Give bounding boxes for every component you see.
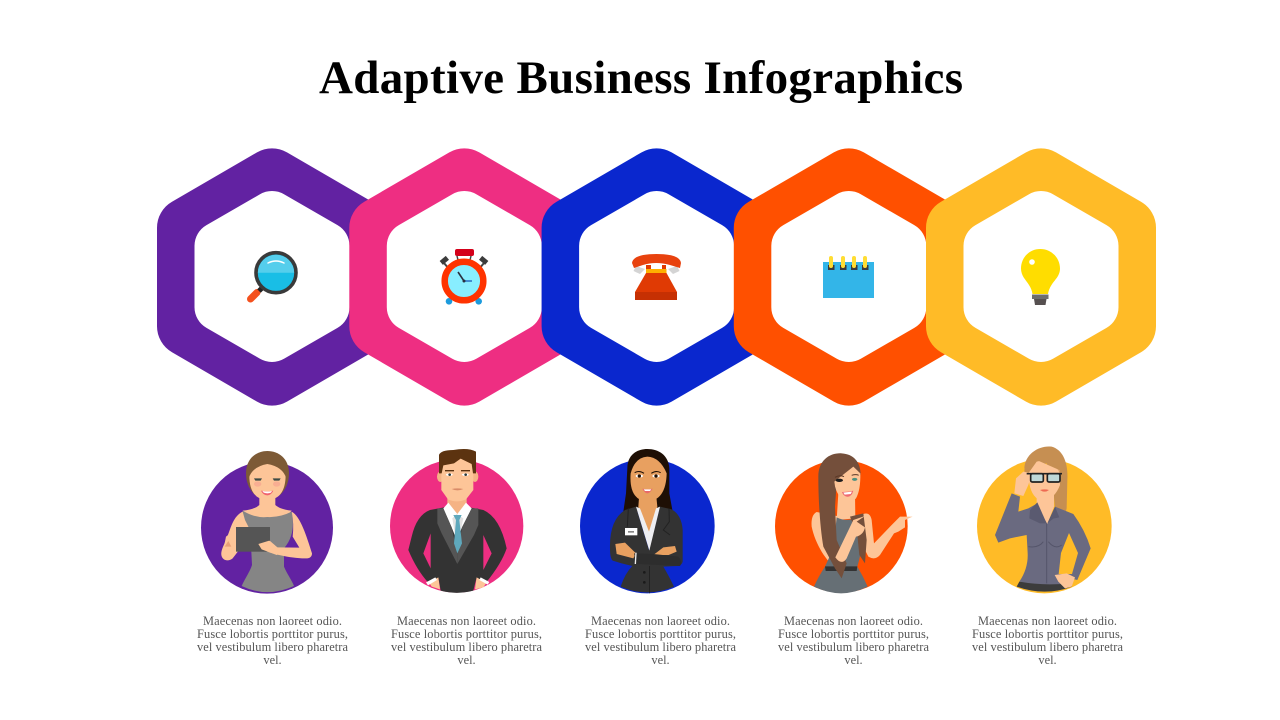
text block 4: Fusce lobortis porttitor purus,	[778, 627, 929, 641]
panel: blue hexagon	[542, 148, 772, 406]
text block 1: vel.	[263, 653, 282, 667]
buttons and center seam	[643, 571, 646, 574]
smile	[842, 491, 853, 497]
tablet	[236, 527, 270, 552]
text block 3: vel.	[651, 653, 670, 667]
text block 5: Fusce lobortis porttitor purus,	[972, 627, 1123, 641]
shirt	[443, 503, 472, 540]
eyes	[446, 473, 453, 476]
purple circle	[201, 462, 333, 594]
text block 5	[972, 614, 1124, 667]
eyes	[254, 478, 262, 481]
left arm	[221, 512, 253, 560]
right arm	[258, 512, 312, 558]
eyes	[836, 479, 843, 482]
text block 5: vel vestibulum libero pharetra	[972, 640, 1124, 654]
suit	[408, 505, 507, 593]
face	[834, 467, 860, 502]
text block 4: Maecenas non laoreet odio.	[784, 614, 923, 628]
mouth	[452, 488, 463, 490]
long dark hair	[623, 449, 673, 512]
icon: telephone	[632, 254, 681, 300]
pink circle	[390, 459, 523, 593]
fringe	[248, 458, 287, 478]
text block 1: Fusce lobortis porttitor purus,	[197, 627, 348, 641]
text block 2: vel vestibulum libero pharetra	[391, 640, 542, 654]
smile	[261, 491, 273, 495]
dress	[814, 517, 868, 593]
panel: orange hexagon	[734, 148, 964, 406]
panel: pink hexagon	[349, 148, 579, 406]
neck	[447, 495, 467, 515]
lapels	[437, 508, 457, 564]
icon: light bulb	[1021, 249, 1060, 305]
hair	[818, 453, 861, 578]
neck and chest	[837, 493, 855, 520]
cuffs	[426, 577, 437, 585]
hair	[439, 449, 476, 473]
text block 1: vel vestibulum libero pharetra	[197, 640, 348, 654]
person 3: businesswoman with arms crossed	[580, 449, 715, 593]
person 4: woman pointing	[775, 453, 913, 593]
shoulders and left arm	[812, 512, 847, 567]
neck	[1037, 495, 1054, 524]
glasses	[1031, 474, 1060, 482]
icon: magnifying glass	[250, 253, 296, 299]
name badge	[625, 528, 637, 535]
eyes	[636, 474, 643, 478]
text block 1	[197, 614, 348, 667]
collar	[1029, 502, 1047, 523]
text block 2: Maecenas non laoreet odio.	[397, 614, 536, 628]
text block 3: Maecenas non laoreet odio.	[591, 614, 730, 628]
person 1: woman with tablet	[201, 451, 333, 594]
cheeks	[254, 481, 261, 487]
face	[1028, 460, 1060, 502]
text block 2	[391, 614, 542, 667]
hair back	[246, 451, 289, 495]
ponytail	[1024, 446, 1067, 522]
text block 4: vel.	[844, 653, 863, 667]
icon: alarm clock	[440, 249, 488, 305]
tie	[453, 515, 462, 553]
orange circle	[775, 460, 908, 593]
text block 3: Fusce lobortis porttitor purus,	[585, 627, 736, 641]
crossed arms	[615, 543, 636, 558]
gap between arm and waist	[1059, 533, 1078, 574]
title: Adaptive Business Infographics	[319, 52, 963, 104]
ears	[437, 471, 444, 482]
belt	[825, 566, 857, 571]
yellow circle	[977, 459, 1112, 593]
face	[249, 462, 286, 500]
blue circle	[580, 459, 715, 593]
lips	[1040, 489, 1049, 492]
right hand over tablet	[258, 541, 287, 555]
neck and shoulders	[243, 493, 292, 520]
white shirt	[636, 507, 660, 551]
text block 2: vel.	[457, 653, 476, 667]
person 5: woman with glasses	[977, 446, 1112, 593]
shirt details	[1028, 523, 1062, 583]
hexagon chain	[157, 148, 1156, 406]
hands	[427, 577, 440, 589]
panel: yellow hexagon	[926, 148, 1156, 406]
pointing arm	[860, 513, 913, 558]
person 2: man in suit	[390, 449, 523, 593]
grey dress	[242, 511, 294, 592]
text block 5: vel.	[1038, 653, 1057, 667]
face	[441, 457, 473, 501]
hair lock	[850, 513, 867, 563]
hand on hip	[1055, 573, 1075, 588]
panel: purple hexagon	[157, 148, 387, 406]
shirt	[995, 493, 1091, 584]
hand on hair	[835, 516, 865, 562]
arm gaps	[423, 533, 431, 568]
text block 2: Fusce lobortis porttitor purus,	[391, 627, 542, 641]
text block 4: vel vestibulum libero pharetra	[778, 640, 930, 654]
left hand fingers	[223, 529, 236, 550]
text block 4	[778, 614, 930, 667]
fringe	[1024, 451, 1060, 473]
text block 3: vel vestibulum libero pharetra	[585, 640, 736, 654]
skirt	[1017, 582, 1072, 592]
face	[630, 457, 667, 502]
mouth	[642, 489, 653, 493]
jacket	[610, 507, 683, 592]
text block 1: Maecenas non laoreet odio.	[203, 614, 342, 628]
skin neck	[638, 493, 657, 547]
text block 5: Maecenas non laoreet odio.	[978, 614, 1117, 628]
hand at glasses	[1014, 472, 1032, 496]
text block 3	[585, 614, 736, 667]
lapel line	[627, 508, 670, 535]
icon: notepad	[823, 256, 874, 298]
